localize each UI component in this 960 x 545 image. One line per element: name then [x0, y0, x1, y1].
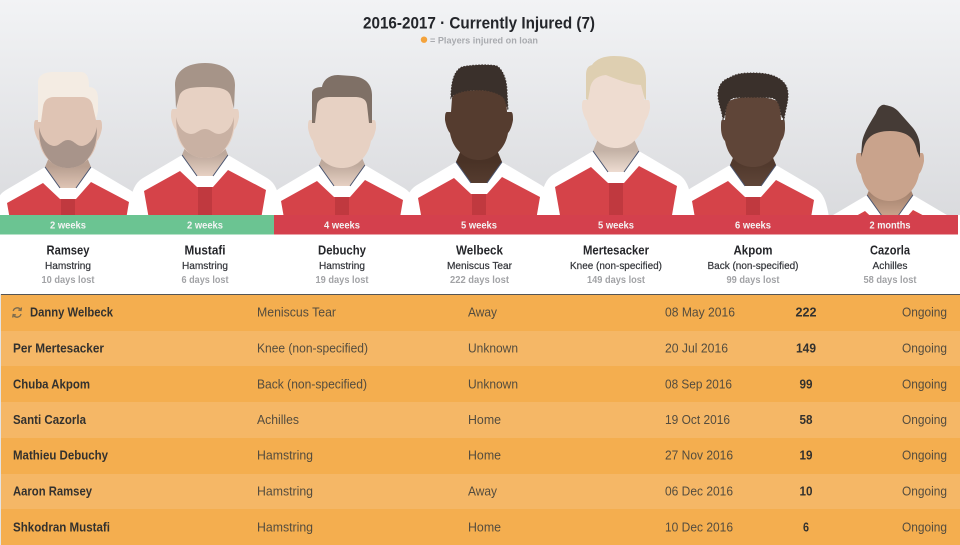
row: Aaron Ramsey: Ongoing [902, 484, 947, 498]
player: Akpom [675, 73, 831, 237]
card: Mertesacker: Mertesacker [583, 244, 649, 258]
row: Chuba Akpom: Unknown [468, 377, 518, 391]
row: Aaron Ramsey: Hamstring [257, 484, 313, 498]
duration labels: 2 weeks [50, 220, 86, 231]
player: Welbeck [401, 65, 557, 234]
title: 2016-2017 · Currently Injured (7) [363, 14, 595, 32]
card: Cazorla [864, 244, 917, 286]
player: Mustafi [127, 63, 283, 227]
player: Ramsey [0, 72, 146, 239]
row: Per Mertesacker: Per Mertesacker [13, 342, 104, 356]
duration bar: green [0, 215, 274, 234]
card: Debuchy: Debuchy [318, 244, 366, 258]
card: Akpom: 99 days lost [726, 275, 780, 286]
duration labels: 2 weeks [187, 220, 223, 231]
duration labels: 2 months [870, 220, 911, 231]
row: Shkodran Mustafi: Hamstring [257, 520, 313, 534]
duration labels: 6 weeks [735, 220, 771, 231]
row: Mathieu Debuchy: 27 Nov 2016 [665, 449, 733, 463]
card: Mertesacker [570, 244, 662, 286]
row: Shkodran Mustafi: Shkodran Mustafi [13, 520, 110, 534]
card: Debuchy: 19 days lost [316, 275, 369, 286]
table: injury list [0, 294, 960, 545]
legend: players injured on loan: = Players injured on loan [430, 35, 538, 46]
row: Mathieu Debuchy: Mathieu Debuchy [13, 449, 108, 463]
row: Mathieu Debuchy [1, 438, 960, 474]
duration labels: 4 weeks [324, 220, 360, 231]
duration labels [50, 220, 911, 231]
row: Chuba Akpom: Chuba Akpom [13, 377, 90, 391]
row: Danny Welbeck: 222 [796, 306, 817, 320]
row: Danny Welbeck: Ongoing [902, 306, 947, 320]
row: Danny Welbeck [1, 295, 960, 331]
card: Welbeck: Meniscus Tear [447, 261, 513, 272]
card: Cazorla: Achilles [872, 261, 908, 272]
row: Santi Cazorla: Home [468, 413, 501, 427]
row: Mathieu Debuchy: Home [468, 449, 501, 463]
card: Mustafi: Mustafi [184, 244, 226, 258]
row: Chuba Akpom: 08 Sep 2016 [665, 377, 732, 391]
row: Danny Welbeck: Danny Welbeck [30, 306, 113, 320]
card: Mustafi: Hamstring [182, 261, 228, 272]
row: Santi Cazorla: Santi Cazorla [13, 413, 87, 427]
row: Santi Cazorla [1, 402, 960, 438]
card: Ramsey [42, 244, 95, 286]
duration labels: 5 weeks [461, 220, 497, 231]
row: Shkodran Mustafi: Ongoing [902, 520, 947, 534]
icon: loan refresh [13, 308, 22, 318]
card: Debuchy: Hamstring [319, 261, 365, 272]
card: Ramsey: Ramsey [46, 244, 90, 258]
duration bar: red [274, 215, 958, 234]
header background [0, 0, 960, 215]
player: Debuchy [264, 75, 420, 237]
card: Akpom: Akpom [734, 244, 772, 258]
row: Aaron Ramsey: 10 [800, 484, 813, 498]
card: Debuchy [316, 244, 369, 286]
row: Shkodran Mustafi: Home [468, 520, 501, 534]
row: Per Mertesacker [1, 331, 960, 366]
card: Ramsey: 10 days lost [42, 275, 95, 286]
card: Akpom: Back (non-specified) [708, 261, 798, 272]
row: Mathieu Debuchy: 19 [800, 449, 813, 463]
row: Aaron Ramsey: 06 Dec 2016 [665, 484, 733, 498]
row: Per Mertesacker: 20 Jul 2016 [665, 342, 728, 356]
row: Santi Cazorla: Ongoing [902, 413, 947, 427]
card: Mertesacker: 149 days lost [587, 275, 646, 286]
player: Mertesacker [538, 56, 694, 223]
card: Mustafi [182, 244, 229, 286]
row: Chuba Akpom: 99 [800, 377, 813, 391]
white card area [0, 234, 960, 295]
card: Welbeck: 222 days lost [450, 275, 510, 286]
duration labels: 5 weeks [598, 220, 634, 231]
row: Per Mertesacker: Knee (non-specified) [257, 342, 368, 356]
row: Chuba Akpom: Ongoing [902, 377, 947, 391]
row: Per Mertesacker: Unknown [468, 342, 518, 356]
row: Per Mertesacker: Ongoing [902, 342, 947, 356]
row: Chuba Akpom [1, 366, 960, 402]
card: Mertesacker: Knee (non-specified) [570, 261, 662, 272]
row: Santi Cazorla: 58 [800, 413, 813, 427]
row: Danny Welbeck: Meniscus Tear [257, 306, 336, 320]
player: Cazorla [812, 105, 960, 267]
row: Santi Cazorla: 19 Oct 2016 [665, 413, 730, 427]
row: Santi Cazorla: Achilles [257, 413, 299, 427]
card: Welbeck: Welbeck [456, 244, 503, 258]
card: Ramsey: Hamstring [45, 261, 91, 272]
card: Cazorla: 58 days lost [864, 275, 917, 286]
row: Shkodran Mustafi: 6 [803, 520, 809, 534]
row: Aaron Ramsey [1, 474, 960, 509]
row: Aaron Ramsey: Away [468, 484, 498, 498]
row: Per Mertesacker: 149 [796, 342, 816, 356]
row: Chuba Akpom: Back (non-specified) [257, 377, 367, 391]
row: Mathieu Debuchy: Hamstring [257, 449, 313, 463]
row: Shkodran Mustafi: 10 Dec 2016 [665, 520, 733, 534]
card: Mustafi: 6 days lost [182, 275, 229, 286]
row: Danny Welbeck: Away [468, 306, 498, 320]
row: Danny Welbeck: 08 May 2016 [665, 306, 735, 320]
row: Shkodran Mustafi [1, 509, 960, 545]
card: Welbeck [447, 244, 513, 286]
row: Mathieu Debuchy: Ongoing [902, 449, 947, 463]
card: Akpom [708, 244, 798, 286]
card: Cazorla: Cazorla [870, 244, 911, 258]
row: Aaron Ramsey: Aaron Ramsey [13, 484, 92, 498]
